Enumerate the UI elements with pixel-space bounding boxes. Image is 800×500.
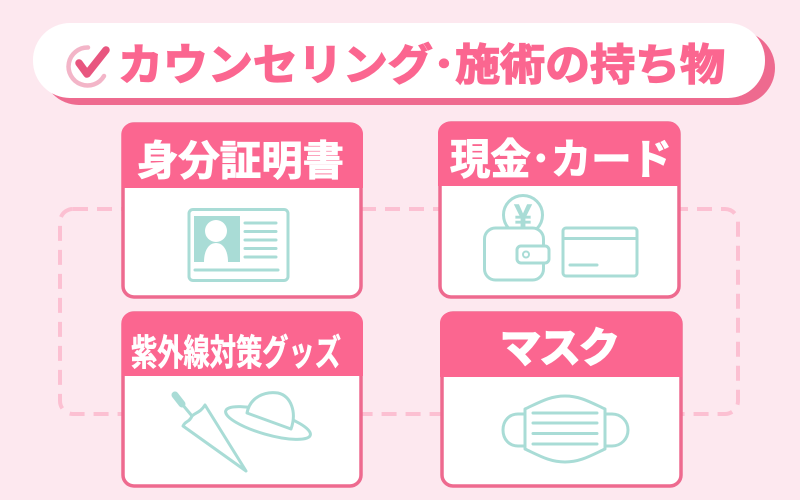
- icon: check mark: [69, 47, 106, 85]
- heading: cash and card: 現金･カード: [450, 136, 672, 183]
- panel: mask: [440, 312, 682, 486]
- icon: wallet with yen coin: ¥: [514, 198, 532, 234]
- heading: identification: 身分証明書: [137, 138, 344, 184]
- icon: ID card: [189, 210, 288, 280]
- panel: UV protection goods: [122, 312, 363, 486]
- icon: credit card: [563, 228, 637, 276]
- panel: cash and card: [438, 122, 680, 297]
- title banner: [33, 23, 775, 105]
- title text: カウンセリング･施術の持ち物: [118, 42, 725, 90]
- icon: face mask: [503, 396, 628, 462]
- icon: wallet with yen coin: [484, 196, 549, 280]
- icon: umbrella: [175, 395, 246, 471]
- panel: identification: [122, 123, 363, 297]
- heading: mask: マスク: [500, 325, 620, 371]
- heading: UV protection goods: 紫外線対策グッズ: [131, 332, 341, 373]
- icon: sun hat: [223, 393, 313, 446]
